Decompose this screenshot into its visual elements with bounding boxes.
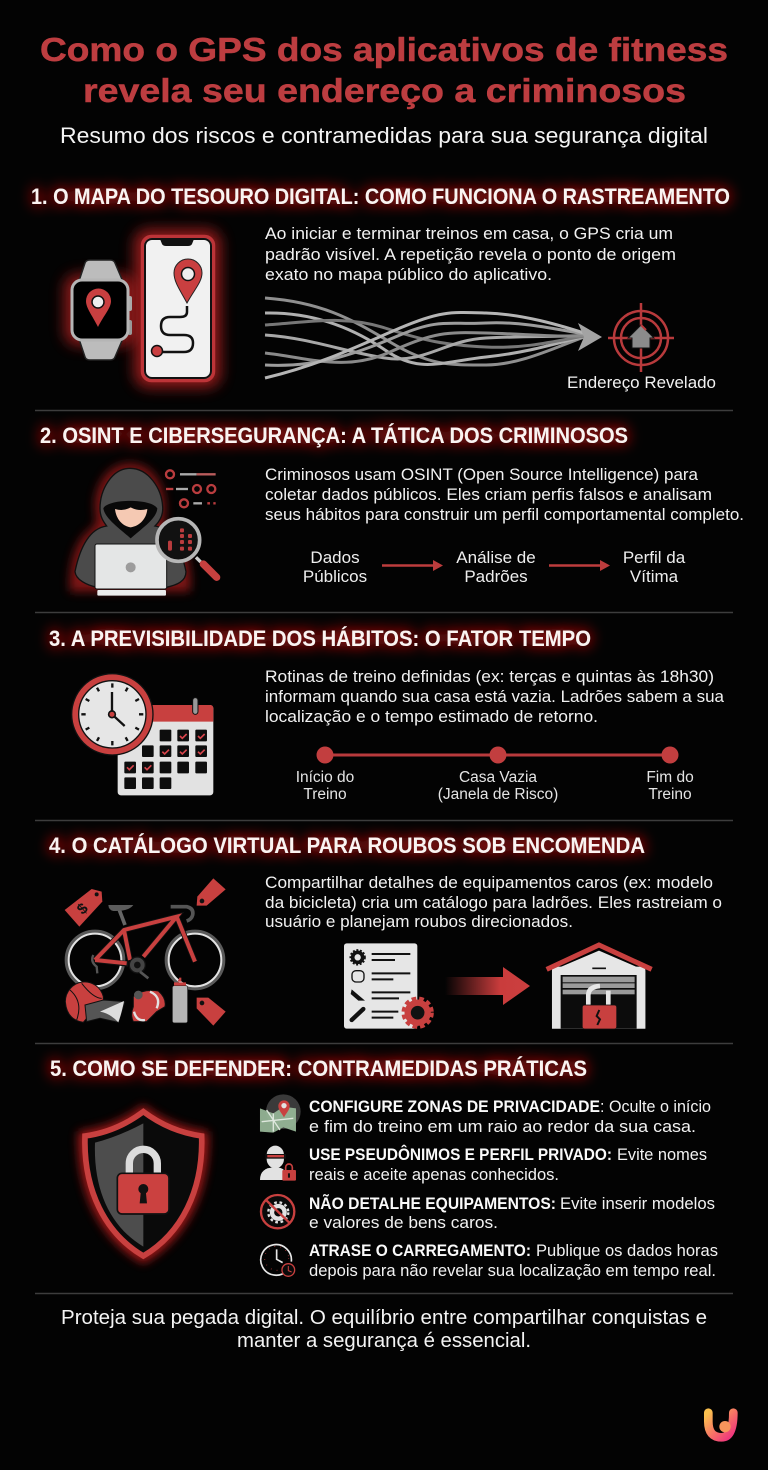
text: section 3 description: informam quando sua casa está vazia. Ladrões sabem a sua bbox=[265, 687, 725, 706]
heading: section 4: 4. O CATÁLOGO VIRTUAL PARA ROUBOS SOB ENCOMENDA bbox=[49, 833, 645, 858]
text: delayed upload: ATRASE O CARREGAMENTO: bbox=[309, 1241, 531, 1260]
chart: converging GPS routes bbox=[265, 298, 602, 378]
flow: public data to victim profile: Vítima bbox=[630, 567, 679, 586]
flow: public data to victim profile: Dados bbox=[310, 548, 360, 567]
text: pseudonyms: USE PSEUDÔNIMOS E PERFIL PRIVADO: bbox=[309, 1145, 612, 1164]
text: delayed upload: Publique os dados horas bbox=[536, 1241, 718, 1260]
title bbox=[40, 31, 728, 109]
icon: delayed upload clock bbox=[261, 1245, 295, 1276]
timeline: empty house risk window: Fim do bbox=[646, 769, 694, 786]
text: equipment details: Evite inserir modelos bbox=[560, 1194, 715, 1213]
icon: bicycle, gear and price tags bbox=[65, 878, 226, 1026]
icon: smartwatch and phone bbox=[64, 229, 221, 388]
panel: section 2 OSINT bbox=[40, 423, 744, 596]
icon: no equipment details bbox=[261, 1195, 294, 1228]
subtitle: Resumo dos riscos e contramedidas para sua segurança digital bbox=[60, 123, 708, 148]
timeline: empty house risk window: Casa Vazia bbox=[459, 769, 537, 786]
icon: garage with broken padlock bbox=[547, 945, 652, 1029]
text: section 4 description: usuário e planejam roubos direcionados. bbox=[265, 912, 573, 931]
icon: target on house bbox=[608, 303, 674, 372]
label: revealed address: Endereço Revelado bbox=[567, 373, 716, 392]
text: section 1 description bbox=[265, 224, 676, 284]
text: section 1 description: Ao iniciar e terminar treinos em casa, o GPS cria um bbox=[265, 224, 673, 243]
text: section 4 description: da bicicleta) cria um catálogo para ladrões. Eles rastreiam o bbox=[265, 893, 722, 912]
panel: section 1 tracking bbox=[31, 184, 730, 392]
text: section 1 description: padrão visível. A repetição revela o ponto de origem bbox=[265, 245, 676, 264]
panel: section 4 catalog bbox=[49, 833, 722, 1029]
icon: shield with padlock bbox=[78, 1105, 208, 1263]
timeline: empty house risk window: Treino bbox=[648, 786, 692, 803]
text: section 4 description: Compartilhar detalhes de equipamentos caros (ex: modelo bbox=[265, 873, 713, 892]
text: section 2 description bbox=[265, 465, 744, 524]
text: privacy zones: e fim do treino em um raio ao redor da sua casa. bbox=[309, 1117, 696, 1136]
text: section 2 description: Criminosos usam OSINT (Open Source Intelligence) para bbox=[265, 465, 699, 484]
arrow: checklist to targeted theft bbox=[445, 967, 530, 1005]
icon: pseudonym user with lock bbox=[260, 1146, 296, 1181]
timeline: empty house risk window: (Janela de Risco) bbox=[438, 786, 558, 803]
panel: section 3 habits bbox=[49, 626, 725, 803]
heading: section 5: 5. COMO SE DEFENDER: CONTRAMEDIDAS PRÁTICAS bbox=[50, 1056, 587, 1081]
text: equipment details: NÃO DETALHE EQUIPAMENTOS: bbox=[309, 1193, 556, 1213]
icon: bicycle, gear and price tags: $ bbox=[74, 900, 92, 918]
title: revela seu endereço a criminosos bbox=[83, 72, 686, 109]
timeline: empty house risk window: Treino bbox=[303, 786, 347, 803]
text: section 3 description bbox=[265, 667, 725, 726]
closing message bbox=[61, 1306, 707, 1352]
text: section 3 description: localização e o tempo estimado de retorno. bbox=[265, 707, 598, 726]
heading: section 2: 2. OSINT E CIBERSEGURANÇA: A TÁTICA DOS CRIMINOSOS bbox=[40, 423, 628, 448]
text: privacy zones: : Oculte o início bbox=[600, 1097, 711, 1116]
flow: public data to victim profile: Padrões bbox=[464, 567, 528, 586]
closing message: Proteja sua pegada digital. O equilíbrio entre compartilhar conquistas e bbox=[61, 1306, 707, 1329]
text: pseudonyms: reais e aceite apenas conhecidos. bbox=[309, 1165, 559, 1184]
text: pseudonyms: Evite nomes bbox=[617, 1145, 707, 1164]
text: section 4 description bbox=[265, 873, 722, 931]
icon: hacker with laptop and magnifier bbox=[70, 463, 217, 596]
text: delayed upload: depois para não revelar sua localização em tempo real. bbox=[309, 1261, 716, 1280]
heading: section 3: 3. A PREVISIBILIDADE DOS HÁBITOS: O FATOR TEMPO bbox=[49, 626, 591, 651]
icon: clock and calendar bbox=[72, 674, 213, 795]
text: section 2 description: seus hábitos para construir um perfil comportamental completo. bbox=[265, 505, 744, 524]
flow: public data to victim profile: Análise de bbox=[456, 548, 536, 567]
closing message: manter a segurança é essencial. bbox=[237, 1329, 531, 1352]
text: privacy zones: CONFIGURE ZONAS DE PRIVACIDADE bbox=[309, 1097, 600, 1116]
flow: public data to victim profile bbox=[303, 548, 686, 586]
icon: brand logo bbox=[708, 1413, 733, 1437]
flow: public data to victim profile: Públicos bbox=[303, 567, 367, 586]
title: Como o GPS dos aplicativos de fitness bbox=[40, 31, 728, 68]
timeline: empty house risk window bbox=[296, 746, 694, 803]
panel: section 5 countermeasures bbox=[50, 1056, 718, 1280]
text: section 2 description: coletar dados públicos. Eles criam perfis falsos e analisam bbox=[265, 485, 712, 504]
text: section 3 description: Rotinas de treino definidas (ex: terças e quintas às 18h30) bbox=[265, 667, 714, 686]
icon: privacy zone map bbox=[260, 1094, 301, 1133]
icon: equipment checklist bbox=[344, 943, 432, 1029]
timeline: empty house risk window: Início do bbox=[296, 769, 354, 786]
flow: public data to victim profile: Perfil da bbox=[623, 548, 686, 567]
text: section 1 description: exato no mapa público do aplicativo. bbox=[265, 265, 552, 284]
text: equipment details: e valores de bens caros. bbox=[309, 1213, 498, 1232]
